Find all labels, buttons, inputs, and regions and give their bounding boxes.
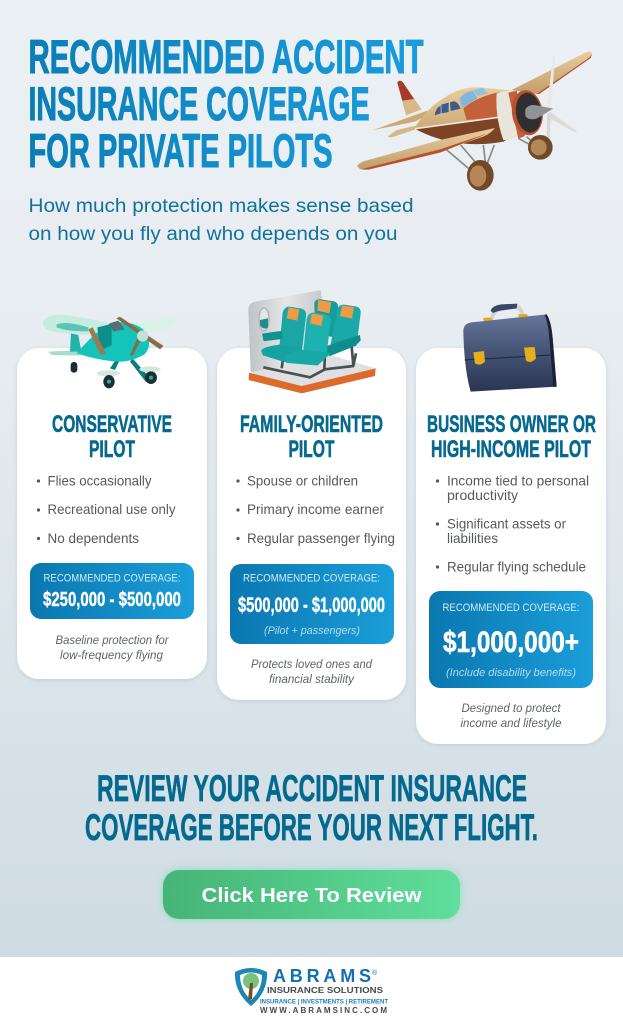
title <box>28 30 424 177</box>
logo: company name: WWW.ABRAMSINC.COM <box>260 1006 387 1015</box>
title: INSURANCE COVERAGE <box>28 77 370 130</box>
bullet list: No dependents <box>48 531 139 546</box>
card title: PILOT <box>288 436 335 463</box>
bullet list: productivity <box>447 488 518 503</box>
subtitle <box>28 196 414 245</box>
bullet list <box>37 474 176 546</box>
note: financial stability <box>269 672 355 686</box>
bullet list: Flies occasionally <box>48 474 152 488</box>
coverage box: (Pilot + passengers) <box>264 625 360 637</box>
logo: company name: ® <box>372 969 378 977</box>
subtitle: How much protection makes sense based <box>28 196 414 217</box>
bullet list: Regular flying schedule <box>447 560 586 574</box>
coverage box <box>429 591 593 688</box>
card title <box>52 411 172 463</box>
card title <box>427 411 596 463</box>
logo: company name: ABRAMS <box>273 966 371 986</box>
bullet list: liabilities <box>447 531 498 546</box>
card title <box>240 411 383 463</box>
logo: company name: INSURANCE SOLUTIONS <box>267 985 383 995</box>
bullet list: Regular passenger flying <box>247 531 395 546</box>
button: click here to review <box>163 870 460 919</box>
coverage box: RECOMMENDED COVERAGE: <box>442 602 580 614</box>
bullet list <box>236 474 395 546</box>
coverage box: RECOMMENDED COVERAGE: <box>243 572 380 584</box>
panel: conservative pilot <box>17 348 207 679</box>
note: Protects loved ones and <box>251 657 372 671</box>
coverage box: (Include disability benefits) <box>446 667 576 679</box>
illustration: teal airplane <box>43 315 177 388</box>
button: click here to review: Click Here To Review <box>202 884 422 907</box>
illustration: briefcase <box>463 304 557 392</box>
panel: business owner or high-income pilot <box>416 348 606 744</box>
logo: shield and tree <box>235 968 267 1006</box>
card title: CONSERVATIVE <box>52 411 172 438</box>
note: income and lifestyle <box>460 716 562 730</box>
card title: FAMILY-ORIENTED <box>240 411 383 438</box>
illustration: cabin seats <box>248 290 376 393</box>
coverage box: $250,000 - $500,000 <box>43 589 181 611</box>
panel: family-oriented pilot <box>217 348 406 700</box>
title: FOR PRIVATE PILOTS <box>28 124 332 177</box>
footer <box>0 957 623 1024</box>
card title: PILOT <box>89 436 135 463</box>
bullet list: Significant assets or <box>447 516 566 532</box>
note: Designed to protect <box>462 701 561 715</box>
bullet list: Spouse or children <box>247 474 358 488</box>
coverage box <box>30 563 194 619</box>
coverage box: RECOMMENDED COVERAGE: <box>44 572 181 584</box>
logo: company name <box>260 966 389 1015</box>
bullet list: Income tied to personal <box>447 474 589 488</box>
bullet list <box>436 474 589 574</box>
note: Baseline protection for <box>56 633 170 647</box>
note <box>460 701 562 730</box>
call to action heading <box>85 768 538 848</box>
note <box>251 657 372 686</box>
subtitle: on how you fly and who depends on you <box>28 224 398 245</box>
coverage box: $500,000 - $1,000,000 <box>238 594 385 617</box>
bullet list: Primary income earner <box>247 502 384 517</box>
note: low-frequency flying <box>60 648 163 662</box>
illustration: vintage tan and red airplane <box>357 52 592 191</box>
note <box>56 633 170 662</box>
coverage box: $1,000,000+ <box>443 626 579 659</box>
coverage box <box>230 564 394 644</box>
logo: company name: INSURANCE | INVESTMENTS | RETIREMENT <box>260 998 389 1006</box>
bullet list: Recreational use only <box>48 502 176 517</box>
